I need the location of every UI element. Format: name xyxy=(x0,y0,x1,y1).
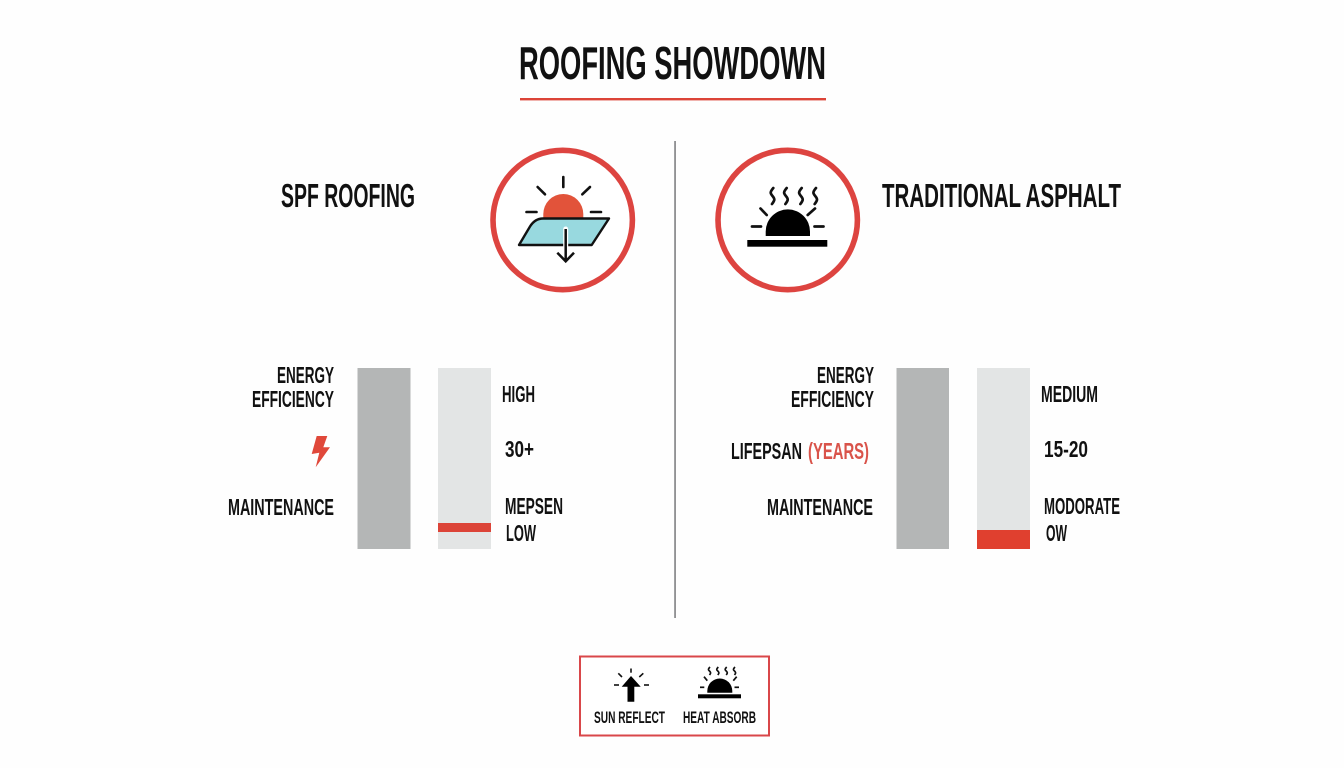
bar: asphalt metric value column xyxy=(977,368,1030,549)
value: ow: OW xyxy=(1046,520,1067,546)
icon: sun reflect arrow xyxy=(614,668,649,702)
value: modorate: MODORATE xyxy=(1044,493,1120,519)
label: sun reflect: SUN REFLECT xyxy=(594,708,665,727)
label: maintenance: MAINTENANCE xyxy=(228,494,334,520)
label: lifespan years: LIFEPSAN xyxy=(731,438,802,464)
bar: SPF metric label column xyxy=(358,368,410,549)
title: ROOFING SHOWDOWN xyxy=(519,37,826,89)
label: maintenance: MAINTENANCE xyxy=(767,494,873,520)
value: 30+: 30+ xyxy=(505,436,534,462)
heading: traditional asphalt: TRADITIONAL ASPHALT xyxy=(882,177,1121,214)
value: high: HIGH xyxy=(502,381,535,407)
legend xyxy=(580,656,769,736)
panel: SPF roofing xyxy=(228,150,632,549)
label: energy efficiency xyxy=(791,362,874,412)
icon: heat absorbing dome xyxy=(718,150,857,290)
label: lifespan years: (YEARS) xyxy=(808,438,869,464)
bar: asphalt metric label column xyxy=(896,368,949,549)
value: 15-20: 15-20 xyxy=(1044,436,1088,462)
icon: heat absorb dome xyxy=(698,667,741,698)
value: medium: MEDIUM xyxy=(1041,381,1098,407)
icon: sun over reflective roof xyxy=(493,150,632,290)
label: energy efficiency xyxy=(252,362,334,412)
label: energy efficiency: ENERGY xyxy=(817,362,874,388)
value: low: LOW xyxy=(506,520,536,546)
panel: traditional asphalt xyxy=(718,150,1121,549)
label: energy efficiency: EFFICIENCY xyxy=(252,386,334,412)
label: heat absorb: HEAT ABSORB xyxy=(683,708,756,727)
heading: SPF roofing: SPF ROOFING xyxy=(281,177,415,214)
label: energy efficiency: EFFICIENCY xyxy=(791,386,874,412)
bar: SPF metric value column xyxy=(438,368,491,549)
label: energy efficiency: ENERGY xyxy=(277,362,334,388)
icon: lightning bolt xyxy=(312,436,330,467)
value: mepsen: MEPSEN xyxy=(505,493,563,519)
